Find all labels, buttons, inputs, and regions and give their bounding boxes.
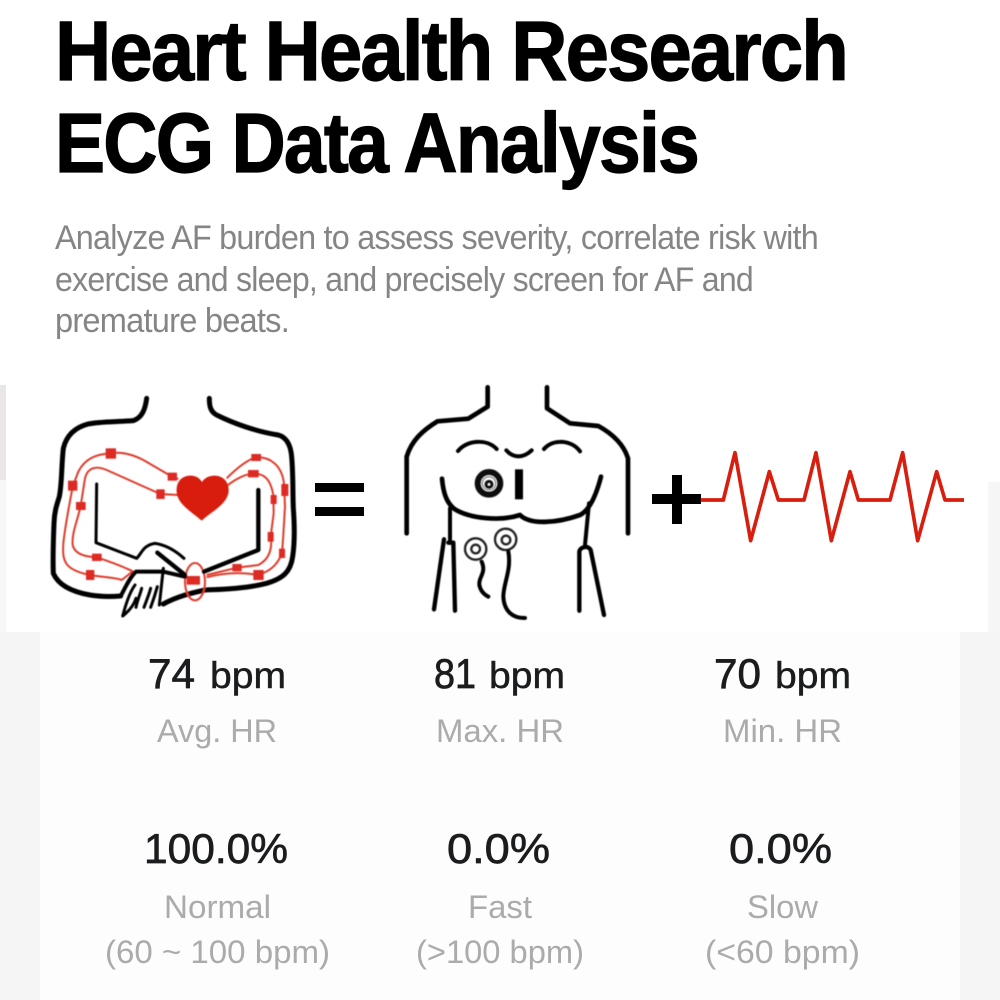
illustration: smartwatch hold on torso with heart signal path xyxy=(53,398,294,616)
red signal path xyxy=(63,453,285,600)
description text: exercise and sleep, and precisely screen for AF and xyxy=(55,261,753,299)
title: Heart Health Research xyxy=(55,4,847,98)
stat: maximum heart rate: Max. HR xyxy=(436,713,564,749)
chest electrode xyxy=(478,472,500,495)
stat: minimum heart rate xyxy=(714,650,851,749)
chest outline xyxy=(407,387,628,615)
electrode nodes xyxy=(68,448,288,585)
lead electrodes and wires xyxy=(465,529,525,618)
sternum bar xyxy=(515,469,523,499)
stat: maximum heart rate xyxy=(434,650,565,749)
stat: average heart rate xyxy=(148,650,286,749)
stat: maximum heart rate: bpm xyxy=(489,655,565,696)
stat: minimum heart rate: Min. HR xyxy=(723,713,842,749)
title xyxy=(55,4,847,190)
illustration: chest with ECG electrodes xyxy=(407,387,628,618)
equals sign xyxy=(315,483,364,516)
stat: normal share: (60 ~ 100 bpm) xyxy=(105,934,330,970)
stat: normal share xyxy=(105,825,330,970)
stat: maximum heart rate: 81 xyxy=(434,650,476,697)
stat: slow share: (<60 bpm) xyxy=(705,934,860,970)
ECG waveform xyxy=(701,453,964,541)
torso outline xyxy=(53,398,294,604)
stat: slow share xyxy=(705,825,860,970)
stat: normal share: 100.0% xyxy=(144,825,288,872)
description text xyxy=(55,219,818,340)
stat: normal share: Normal xyxy=(164,889,271,925)
description text: Analyze AF burden to assess severity, correlate risk with xyxy=(55,219,818,257)
stat: slow share: 0.0% xyxy=(729,825,832,872)
arms and hand xyxy=(96,484,258,616)
stat: minimum heart rate: bpm xyxy=(775,655,851,696)
stat: fast share xyxy=(416,825,584,970)
stat: minimum heart rate: 70 xyxy=(714,650,761,697)
stat: average heart rate: bpm xyxy=(210,655,286,696)
stat: average heart rate: Avg. HR xyxy=(157,713,277,749)
description text: premature beats. xyxy=(55,302,289,340)
plus sign xyxy=(652,475,701,524)
stat: fast share: (>100 bpm) xyxy=(416,934,584,970)
stat: fast share: Fast xyxy=(468,889,532,925)
stat: fast share: 0.0% xyxy=(447,825,550,872)
heart xyxy=(177,476,229,521)
stat: average heart rate: 74 xyxy=(148,650,195,697)
title: ECG Data Analysis xyxy=(55,96,698,190)
stat: slow share: Slow xyxy=(747,889,819,925)
